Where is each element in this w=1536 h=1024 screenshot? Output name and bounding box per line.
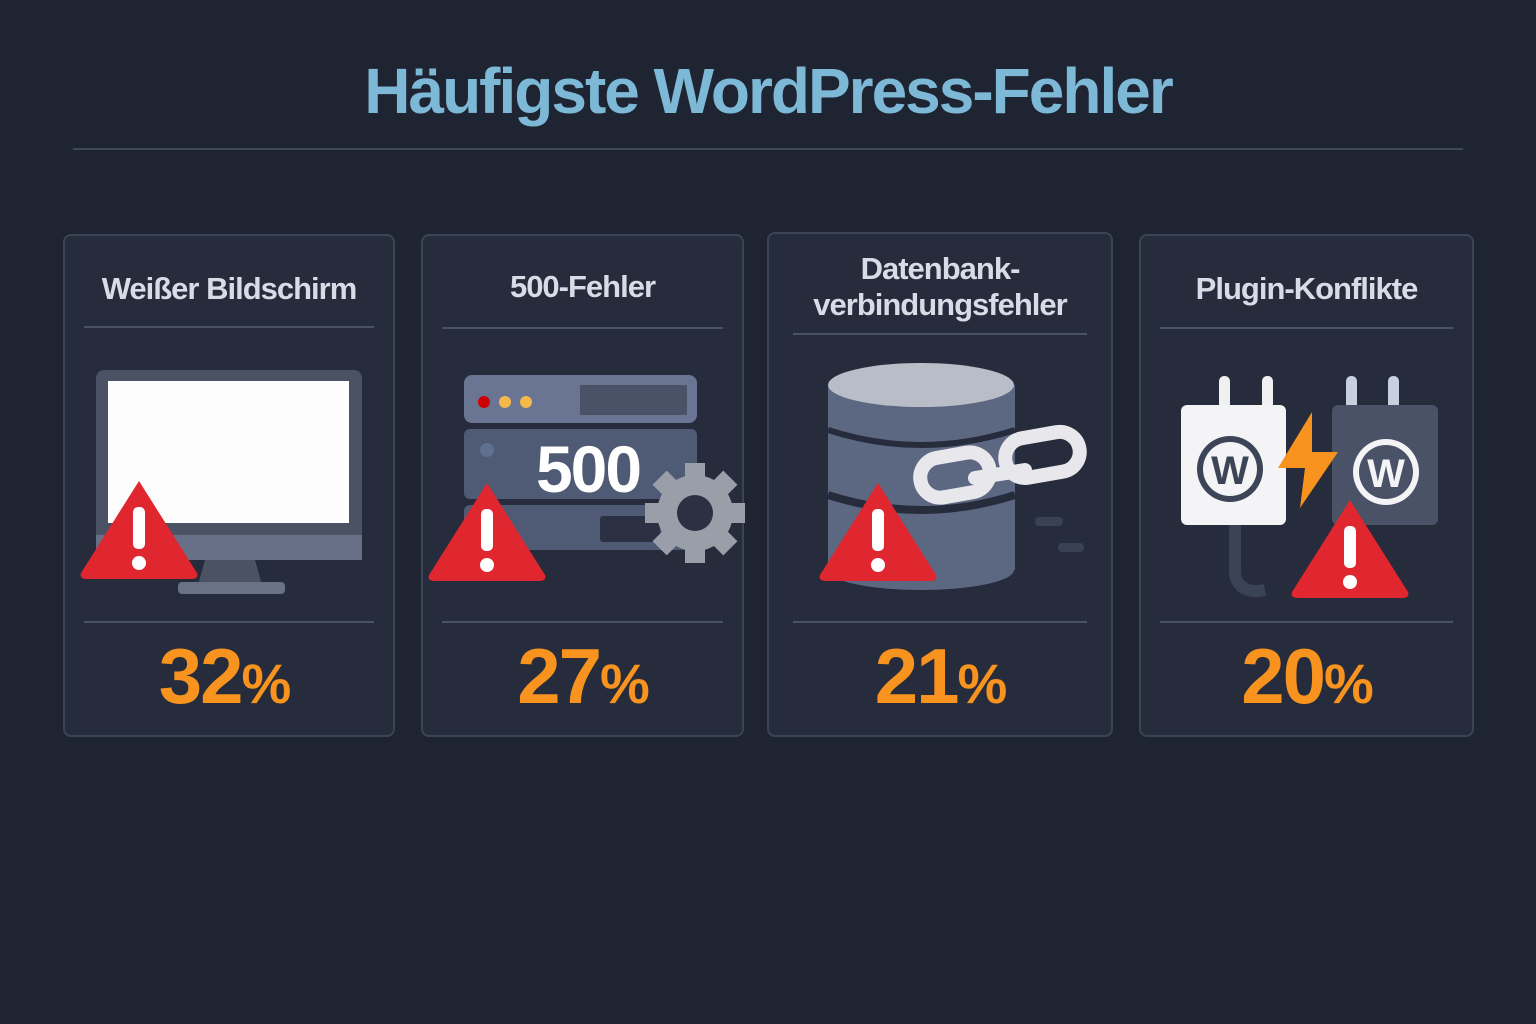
panel: white screen xyxy=(63,234,395,737)
panel: plugin conflicts xyxy=(1139,234,1474,737)
title: Häufigste WordPress-Fehler xyxy=(364,55,1172,127)
panel: 500 error xyxy=(421,234,744,737)
icon: monitor xyxy=(81,370,362,594)
percent 32: 32% xyxy=(159,632,289,720)
heading: white screen: Weißer Bildschirm xyxy=(102,271,356,306)
icon: server 500: 500 xyxy=(536,432,640,506)
percent 27: 27% xyxy=(517,632,648,720)
percent 21: 21% xyxy=(875,632,1005,720)
heading: database xyxy=(813,251,1068,322)
icon: plugins: W xyxy=(1211,449,1249,493)
panel: database xyxy=(767,232,1113,737)
icon: plugins: W xyxy=(1367,452,1405,496)
heading: database: Datenbank- xyxy=(861,251,1019,286)
heading: database: verbindungsfehler xyxy=(813,287,1067,322)
heading: 500 error: 500-Fehler xyxy=(510,269,655,304)
icon: database with broken link xyxy=(820,363,1084,590)
icon: server 500 xyxy=(429,375,745,581)
icon: plugins xyxy=(1181,376,1438,598)
percent 20: 20% xyxy=(1241,632,1372,720)
heading: plugins: Plugin-Konflikte xyxy=(1196,271,1417,306)
